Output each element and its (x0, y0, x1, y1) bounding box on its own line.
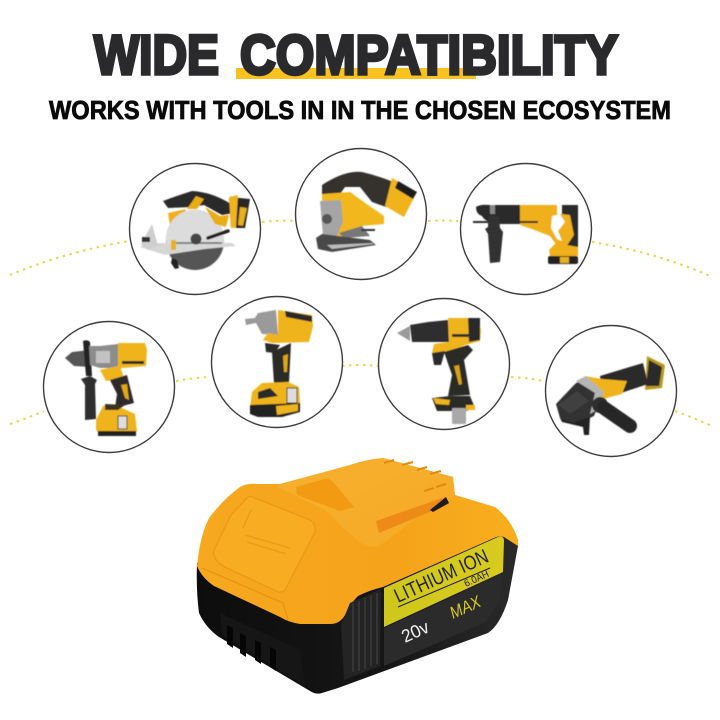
voltage text: 20v (398, 617, 432, 647)
battery label (384, 536, 504, 627)
tool circle: hammer drill (44, 322, 174, 452)
battery yellow shell (197, 458, 518, 624)
battery ribbed side panel (341, 589, 381, 680)
tool circle: rotary hammer (460, 164, 592, 294)
battery black lower body (197, 520, 518, 694)
battery rear ribs (384, 460, 446, 491)
title highlight bar (236, 68, 476, 79)
title: COMPATIBILITY (240, 23, 618, 86)
label rule (398, 568, 490, 607)
battery black notch (430, 497, 449, 512)
battery side slots (376, 497, 449, 533)
max text: MAX (447, 592, 484, 623)
title (94, 23, 618, 86)
battery lower dark panel (384, 574, 503, 666)
battery panel ribs (353, 593, 377, 672)
capacity text: 6.0AH (463, 569, 491, 590)
battery top plateau (276, 458, 455, 547)
battery (197, 458, 518, 694)
battery lid (214, 496, 315, 592)
tool circle: compact drill (378, 298, 510, 430)
lithium ion text: LITHIUM ION (391, 546, 492, 608)
dotted connecting arcs (10, 220, 712, 426)
title: WIDE (94, 23, 219, 86)
tool circle: circular saw (130, 164, 260, 294)
battery vents (220, 613, 305, 686)
battery lip crease (202, 568, 288, 620)
battery lid grip lines (243, 510, 290, 554)
subtitle: WORKS WITH TOOLS IN IN THE CHOSEN ECOSYSTEM (49, 95, 671, 125)
tool circle: jigsaw (296, 148, 426, 280)
tool circle: impact wrench (212, 296, 342, 428)
battery release button (296, 479, 354, 511)
tool circle: angle grinder (546, 326, 676, 456)
